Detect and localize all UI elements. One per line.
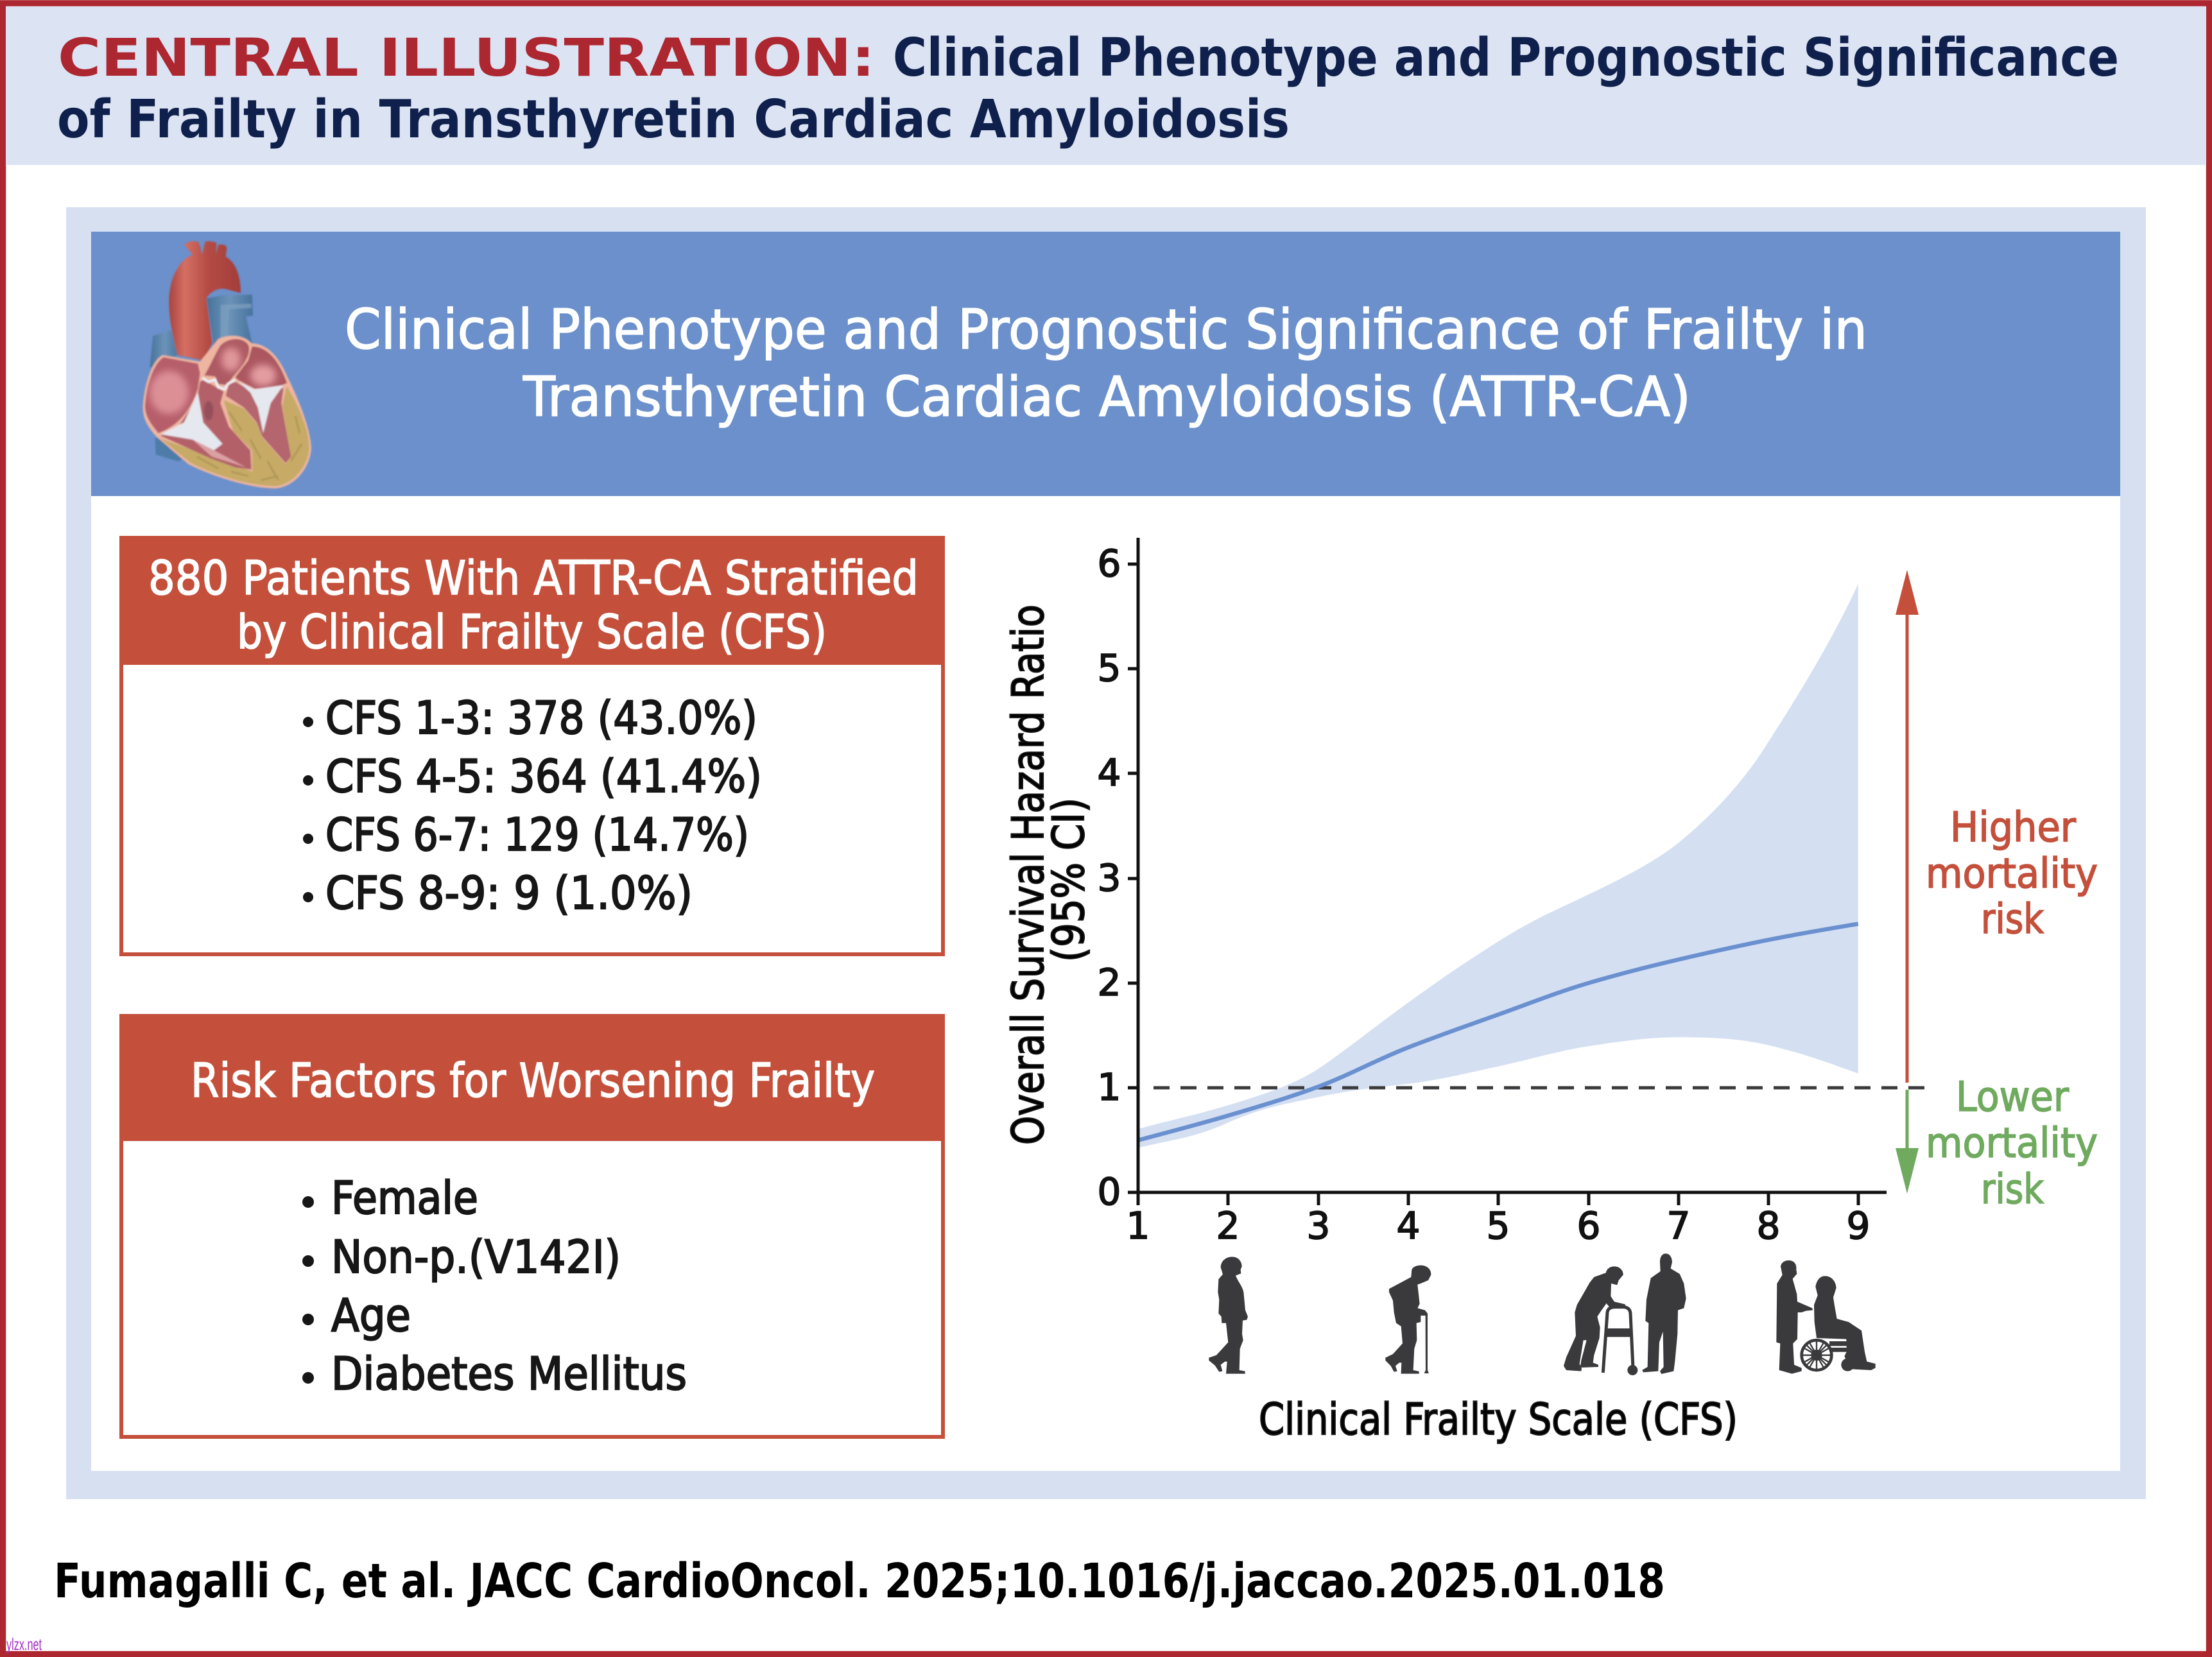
- header line 1: 880 Patients With ATTR-CA Stratified: [148, 551, 919, 606]
- icon: person with cane: [1385, 1266, 1431, 1374]
- list: risk factors: Female: [331, 1172, 478, 1224]
- watermark: ylzx.net: [6, 1635, 42, 1654]
- list: CFS groups: CFS 8-9: 9 (1.0%): [325, 867, 693, 920]
- panel: risk factors: [119, 1014, 945, 1437]
- icon: anatomical heart: [143, 241, 311, 488]
- y-axis title line 2: (95% CI): [1044, 798, 1094, 962]
- heading: central illustration label: CENTRAL ILLUSTRATION:: [58, 28, 875, 89]
- list: risk factors: Non-p.(V142I): [331, 1231, 621, 1284]
- list: CFS groups: CFS 6-7: 129 (14.7%): [325, 809, 749, 861]
- banner title line 1: Clinical Phenotype and Prognostic Significance of Frailty in: [345, 298, 1867, 362]
- heading: title line 2: of Frailty in Transthyretin Cardiac Amyloidosis: [57, 89, 1290, 150]
- panel header: [119, 536, 945, 665]
- reference line at HR 1: [1154, 1086, 1927, 1090]
- x-axis tick labels: 3: [1307, 1204, 1330, 1248]
- x-axis tick labels: [1127, 1204, 1870, 1248]
- label: higher mortality risk: mortality: [1926, 850, 2098, 898]
- list: CFS groups: [303, 692, 762, 920]
- label: lower mortality risk: mortality: [1926, 1120, 2098, 1167]
- list: risk factors: Diabetes Mellitus: [331, 1348, 687, 1400]
- x-axis tick labels: 8: [1757, 1204, 1780, 1248]
- y-axis tick labels: 5: [1098, 646, 1121, 690]
- hazard ratio curve: [1138, 924, 1858, 1140]
- y-axis tick labels: 1: [1098, 1065, 1121, 1109]
- panel: patients by CFS: [119, 536, 945, 954]
- y-axis tick labels: [1098, 542, 1121, 1214]
- list: CFS groups: CFS 1-3: 378 (43.0%): [325, 692, 757, 744]
- list: risk factors: [302, 1172, 687, 1400]
- axes: [1128, 538, 1887, 1205]
- x-axis tick labels: 7: [1667, 1204, 1690, 1248]
- header text: Risk Factors for Worsening Frailty: [191, 1054, 875, 1108]
- label: lower mortality risk: risk: [1981, 1166, 2044, 1214]
- x-axis tick labels: 5: [1487, 1204, 1510, 1248]
- label: lower mortality risk: [1926, 1074, 2098, 1214]
- icon: caregiver and wheelchair: [1776, 1260, 1876, 1374]
- arrow: higher mortality: [1896, 570, 1919, 1083]
- citation: Fumagalli C, et al. JACC CardioOncol. 2025;10.1016/j.jaccao.2025.01.018: [54, 1554, 1665, 1609]
- panel header: [119, 1014, 945, 1141]
- x-axis tick labels: 2: [1216, 1204, 1240, 1248]
- icon: person walking: [1209, 1257, 1248, 1374]
- confidence band: [1138, 584, 1858, 1148]
- x-axis tick labels: 6: [1577, 1204, 1600, 1248]
- y-axis title line 1: Overall Survival Hazard Ratio: [1003, 605, 1054, 1145]
- banner: [91, 232, 2120, 496]
- x-axis tick labels: 4: [1397, 1204, 1420, 1248]
- chart: hazard ratio by CFS: [1003, 538, 1927, 1445]
- y-axis tick labels: 6: [1098, 542, 1121, 585]
- header band: [6, 6, 2206, 165]
- banner title line 2: Transthyretin Cardiac Amyloidosis (ATTR-CA): [523, 365, 1691, 429]
- y-axis tick labels: 4: [1098, 751, 1121, 794]
- y-axis tick labels: 2: [1098, 961, 1121, 1004]
- label: higher mortality risk: [1926, 804, 2098, 943]
- arrow: lower mortality: [1896, 1090, 1919, 1194]
- list: CFS groups: CFS 4-5: 364 (41.4%): [325, 750, 762, 803]
- main panel: [66, 207, 2146, 1499]
- label: higher mortality risk: risk: [1981, 896, 2044, 943]
- label: higher mortality risk: Higher: [1950, 804, 2077, 852]
- label: lower mortality risk: Lower: [1956, 1074, 2069, 1121]
- icon: person with walker and standing person: [1564, 1253, 1686, 1375]
- header line 2: by Clinical Frailty Scale (CFS): [237, 605, 827, 660]
- x-axis tick labels: 1: [1127, 1204, 1150, 1248]
- y-axis tick labels: 0: [1098, 1170, 1121, 1214]
- list: risk factors: Age: [331, 1289, 411, 1342]
- x-axis title: Clinical Frailty Scale (CFS): [1259, 1395, 1738, 1445]
- y-axis tick labels: 3: [1098, 856, 1121, 900]
- x-axis tick labels: 9: [1847, 1204, 1870, 1248]
